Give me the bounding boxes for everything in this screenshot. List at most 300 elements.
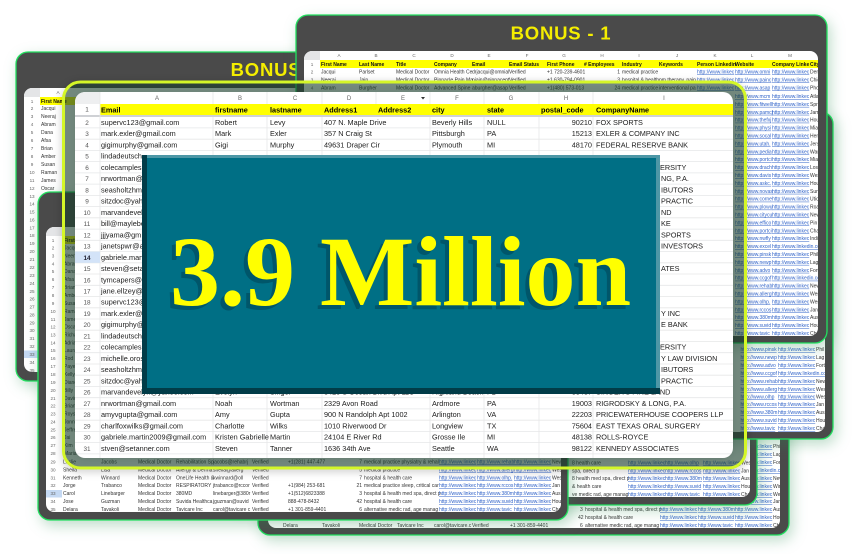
table: bonus 1: Advanced Spine: [434, 86, 471, 92]
table: bonus 1: http://www.davis: [735, 173, 772, 179]
table rows: upper right sheet: Fort: [816, 363, 826, 369]
table: bonus 1: Jers: [810, 141, 820, 147]
table: main spreadsheet: colecamples: [101, 343, 142, 352]
table: main spreadsheet: A: [155, 96, 159, 102]
table: main spreadsheet: 24104 E River Rd: [324, 433, 382, 442]
table: lower left sheet: Tavicare Inc: [176, 507, 203, 513]
table: bonus 1: Hen: [810, 134, 819, 140]
table: lower left sheet: Aus: [552, 491, 561, 497]
table rows: upper right sheet: http://www.linkec: [778, 426, 816, 432]
table rows: back sheet: http://www.tavic: [698, 523, 733, 529]
table: lower left sheet: 7: [52, 285, 55, 290]
table rows: back sheet: http://www.linkec: [735, 515, 773, 521]
table: main spreadsheet: michelle.oros: [101, 354, 144, 363]
table: lower left sheet: Medical Doctor: [138, 507, 172, 513]
table: lower left sheet: http://www.linkec: [439, 507, 477, 513]
table: lower left sheet: hospital & health med spa, direct p: [364, 491, 441, 497]
table: lower left sheet: http://www.linkec: [514, 507, 552, 513]
table: bonus 1: http://www.newp: [735, 260, 772, 266]
table: main spreadsheet: Levy: [270, 118, 286, 127]
table: bonus 1: http://www.linkec: [772, 102, 810, 108]
table: main spreadsheet: Amy: [215, 410, 230, 419]
table: main spreadsheet: janetspwr@a: [100, 242, 145, 250]
table: lower left sheet: http://www.linkec: [439, 499, 477, 505]
table: lower left sheet: 15: [50, 348, 56, 353]
table: lower left sheet: RESPIRATORY: [176, 483, 212, 489]
table: lower left sheet: 20: [50, 388, 56, 393]
table rows: upper right sheet: http://www.linkec: [778, 410, 816, 416]
table: main spreadsheet: 8: [85, 187, 89, 194]
table: main spreadsheet: MI: [487, 433, 495, 442]
table: lower left sheet: 6: [359, 507, 362, 513]
table: bonus 1: Person Linkedin: [697, 62, 736, 68]
table: bonus 1: http://www.linkec: [772, 94, 810, 100]
table: bonus 1: http://www.mcm: [735, 94, 770, 100]
table: main spreadsheet: 1636 34th Ave: [324, 444, 371, 453]
table: lower left sheet: Winnard: [101, 476, 120, 482]
table rows: back sheet: hospital & health med spa, direct p: [585, 507, 662, 513]
table: main spreadsheet: 3: [85, 131, 89, 138]
table: bonus 1: Lag: [810, 260, 819, 266]
table: main spreadsheet: EAST TEXAS ORAL SURGERY: [596, 421, 700, 430]
table rows: middle sheet: Wes: [741, 460, 751, 466]
table: lower left sheet: 17: [50, 364, 56, 369]
table: main spreadsheet: 33487: [572, 388, 592, 397]
table: main spreadsheet: postal_code: [541, 106, 584, 114]
table: bonus 1: Parlset: [359, 70, 375, 76]
table: lower left sheet: Kim: [64, 443, 73, 449]
table: bonus 1: Wan: [810, 149, 820, 155]
table: main spreadsheet: IBUTORS: [661, 185, 693, 194]
table: bonus 1: http://www.fitwell: [735, 102, 772, 108]
table rows: back sheet: +1 301-859-4401: [510, 523, 548, 529]
table rows: back sheet: Fort: [773, 460, 782, 466]
table: main spreadsheet: colecamples: [101, 163, 142, 172]
table: bonus 1: Hou: [810, 181, 819, 187]
table: main spreadsheet: Singer: [270, 388, 292, 397]
table rows: back sheet: Phil: [773, 444, 781, 450]
table: lower left sheet: Jan: [552, 483, 560, 489]
table: bonus 1: Pho: [810, 86, 819, 92]
table rows: upper right sheet: http://www.olhp: [740, 394, 775, 400]
table: main spreadsheet: lindadeutsch: [101, 152, 142, 161]
table: lower left sheet: Jacobs: [101, 460, 117, 466]
table rows: back sheet: Delara: [283, 523, 298, 529]
table rows: upper right sheet: http://www.linkec: [778, 418, 816, 424]
table: bonus 1: Pinnacle Pain Ma: [434, 78, 473, 84]
table: lower left sheet: Kenneth: [63, 476, 82, 482]
table: main spreadsheet: 19: [83, 311, 91, 318]
table: main spreadsheet: 90210: [572, 118, 592, 127]
table: lower left sheet: Brian: [64, 285, 76, 291]
table rows: middle sheet: http://www.linkec: [703, 476, 741, 482]
table: lower left sheet: 12: [50, 324, 56, 330]
table: bonus 1: Company Linke: [772, 62, 809, 68]
table: lower left sheet: sheila@allerg: [213, 468, 244, 474]
table: main spreadsheet: SPORTS: [661, 230, 691, 239]
table: bonus 1: Jacqui: [321, 70, 335, 76]
table rows: middle sheet: http://www.380m: [665, 476, 702, 482]
table: lower left sheet: Billy: [64, 388, 74, 394]
table: lower left sheet: http://www.linkec: [514, 476, 552, 482]
table: bonus 1: http://www.linkec: [772, 212, 810, 218]
table: lower left sheet: Linebarger: [101, 491, 125, 497]
table rows: upper right sheet: http://www.linkec: [778, 363, 816, 369]
table rows: middle sheet: http://www.linkec: [703, 492, 741, 498]
table: lower left sheet: carol@tavicare c: [213, 507, 251, 513]
table rows: middle sheet: Jan: [741, 468, 749, 474]
table: bonus left: 35: [29, 368, 35, 373]
table: lower left sheet: http://www.linkec: [439, 483, 477, 489]
table rows: back sheet: Verified: [472, 523, 489, 529]
table: lower left sheet: Diane: [64, 380, 77, 386]
table: main spreadsheet: ND: [661, 208, 672, 217]
table: bonus left: 14: [29, 202, 35, 206]
table: bonus 1: +1(480) 573-013: [547, 86, 584, 92]
table: lower left sheet: 3: [52, 254, 55, 258]
table: bonus left: 28: [29, 312, 35, 318]
table: main spreadsheet: 29: [83, 423, 91, 430]
table: main spreadsheet: Charlotte: [215, 421, 245, 430]
table: main spreadsheet: PRACTIC: [661, 197, 693, 206]
table: lower left sheet: Rod: [64, 356, 73, 362]
table rows: upper right sheet: http://www.linkec: [778, 387, 816, 393]
table rows: back sheet: http://www.380m: [698, 507, 735, 513]
table: main spreadsheet: PA: [487, 399, 496, 408]
table: bonus 1: Verified: [509, 86, 526, 92]
table: lower left sheet: +1(281) 447-477: [288, 460, 325, 466]
table: main spreadsheet: Exler: [270, 129, 287, 138]
table: lower left sheet: Cha: [552, 507, 561, 513]
table: bonus 1: 1: [311, 62, 314, 67]
table: lower left sheet: 8: [52, 293, 55, 298]
table: lower left sheet: hospital & health care: [364, 499, 412, 505]
panel: back sheet, bottom right: [253, 440, 800, 548]
table: bonus 1: http://www.linkec: [772, 315, 810, 321]
table rows: middle sheet: 8 health care: [572, 460, 601, 466]
table rows: back sheet: http://www.linkec: [735, 476, 773, 482]
table: bonus 1: G: [562, 53, 566, 58]
table: bonus 1: http://www.linkec: [697, 86, 735, 92]
table: main spreadsheet: CompanyName: [596, 106, 649, 114]
table rows: upper right sheet: Cha: [816, 426, 825, 432]
table: lower left sheet: alternative medic rad, age manag: [364, 507, 438, 513]
table: lower left sheet: http://www.linkec: [439, 468, 477, 474]
table rows: middle sheet: ve medic rad, age manag: [572, 492, 629, 498]
table: bonus 1: Cha: [810, 228, 819, 234]
table: bonus 1: http://www.askc.: [735, 181, 771, 187]
table: lower left sheet: Carol: [63, 491, 75, 497]
table: lower left sheet: Allergy & Derma: [176, 468, 213, 474]
table: bonus 1: hospital & health: [622, 78, 659, 84]
table: main spreadsheet: Address2: [378, 106, 411, 114]
table rows: back sheet: Tavakoli: [322, 523, 340, 529]
table: main spreadsheet: marvandevel: [101, 208, 143, 217]
table: main spreadsheet: 17: [83, 288, 91, 296]
table: main spreadsheet: 12: [83, 232, 91, 239]
table rows: middle sheet: & health care: [572, 484, 602, 490]
panel: bonus 1 sheet: [296, 15, 827, 343]
table: main spreadsheet: 28: [83, 412, 91, 419]
table rows: middle sheet: http://www.olhp: [665, 460, 699, 466]
table rows: back sheet: hospital & health care: [585, 515, 633, 521]
table: main spreadsheet: mark.exler@: [101, 309, 142, 318]
table: bonus 1: C: [412, 53, 416, 58]
table: main spreadsheet: Y INC: [661, 309, 680, 318]
table: main spreadsheet: ERSITY: [660, 343, 686, 352]
table: bonus 1: http://www.linkec: [772, 173, 810, 179]
table: main spreadsheet: ATES: [661, 264, 680, 273]
table rows: upper right sheet: http://www.advo: [740, 363, 776, 369]
table: lower left sheet: Neeraj: [64, 254, 79, 260]
table: lower left sheet: Verified: [252, 507, 269, 513]
table: lower left sheet: 888-478-8432: [288, 499, 319, 505]
table rows: back sheet: 3: [580, 507, 583, 513]
table: lower left sheet: medical practice sleep, critical car: [364, 483, 439, 489]
table: main spreadsheet: PRACTIC: [661, 376, 693, 385]
callout: 3.9 Million banner: [142, 155, 660, 394]
table: main spreadsheet: Highland Beach: [432, 388, 484, 397]
table: bonus 1: medical practice: [622, 86, 658, 92]
table rows: back sheet: Tavicare Inc: [397, 523, 424, 529]
table: bonus 1: Keywords: [659, 62, 683, 68]
table rows: back sheet: Win: [773, 484, 782, 490]
table: bonus 1: Hou: [810, 118, 819, 124]
table: bonus 1: http://www.linkec: [772, 331, 810, 337]
table rows: upper right sheet: New: [816, 379, 826, 385]
table: bonus 1: Company: [434, 62, 457, 68]
table: bonus 1: Los: [810, 165, 819, 171]
table: main spreadsheet: FEDERAL RESERVE BANK: [596, 140, 688, 149]
table: bonus 1: http://www.linkec: [772, 86, 810, 92]
table: bonus 1: +1 630-794-0901: [547, 78, 585, 84]
table: main spreadsheet: Robert: [215, 118, 237, 127]
table: lower left sheet: Raman: [64, 309, 80, 315]
table: main spreadsheet: Gupta: [270, 410, 291, 419]
table: bonus 1: http://www.linkec: [772, 307, 810, 313]
table: bonus left: 24: [29, 281, 35, 286]
table rows: upper right sheet: http://www.rccos: [740, 402, 777, 408]
table: bonus 1: http://www.linkec: [772, 284, 810, 290]
table: lower left sheet: Leslie: [63, 460, 76, 466]
table: main spreadsheet: mark.exler@gmail.com: [101, 129, 176, 138]
table: lower left sheet: jtrabanco@rccor: [212, 483, 250, 489]
table: main spreadsheet: 30: [83, 435, 91, 442]
table: lower left sheet: Amber: [64, 293, 79, 299]
table rows: upper right sheet: http://www.380m: [740, 410, 777, 416]
table rows: back sheet: Cha: [773, 523, 782, 529]
table: main spreadsheet: I: [663, 96, 665, 102]
table rows: back sheet: http://www.linkec: [660, 507, 698, 513]
table rows: back sheet: 6: [580, 523, 583, 529]
table: main spreadsheet: state: [487, 106, 504, 114]
table rows: back sheet: Hou: [773, 515, 782, 521]
table: bonus 1: http://www.linkedin.co: [772, 244, 820, 250]
table rows: back sheet: http://www.linkec: [735, 507, 773, 513]
table rows: back sheet: carol@tavicare.c: [434, 523, 472, 529]
table: bonus 1: Atla: [810, 94, 819, 100]
table: lower left sheet: 34: [50, 499, 56, 504]
table: bonus 1: K: [713, 53, 717, 58]
table rows: upper right sheet: http://www.tavic: [740, 426, 776, 432]
table: main spreadsheet: SINGER'S FINE LAND: [596, 388, 670, 397]
table: lower left sheet: 7: [359, 460, 362, 466]
table: bonus 1: L: [751, 53, 754, 58]
table: bonus left: 7: [31, 146, 34, 151]
table: main spreadsheet: amyvgupta@gmail.com: [101, 410, 177, 419]
table: main spreadsheet: RIGRODSKY & LONG, P.A.: [596, 399, 686, 408]
table rows: middle sheet: http://www.linkec: [703, 484, 741, 490]
headline number: 3.9 Million: [166, 220, 627, 331]
table rows: middle sheet: http://www.linkec: [703, 460, 741, 466]
table: bonus 1: http://www.linkec: [772, 323, 810, 329]
table: lower left sheet: http://www.tavic: [477, 507, 512, 513]
table: bonus 1: http://www.novas: [735, 189, 773, 195]
table: lower left sheet: 14: [50, 340, 56, 346]
table: lower left sheet: Verified: [252, 468, 269, 474]
table rows: middle sheet: http://www.linkec: [628, 476, 666, 482]
table: bonus 1: http://www.portci: [735, 157, 772, 163]
table: main spreadsheet: Plymouth: [432, 140, 462, 149]
table rows: back sheet: alternative medic rad, age manag: [585, 523, 659, 529]
table: lower left sheet: medical practice: [364, 468, 400, 474]
table: lower left sheet: http://www.linkec: [439, 491, 477, 497]
table: lower left sheet: Medical Doctor: [138, 491, 172, 497]
table: main spreadsheet: Murphy: [270, 140, 295, 149]
table rows: upper right sheet: http://www.linkec: [778, 347, 816, 353]
table: main spreadsheet: Pittsburgh: [432, 129, 465, 138]
table: bonus 1: Mia: [810, 126, 818, 132]
table rows: upper right sheet: http://www.linkedin.co: [778, 371, 826, 377]
table: bonus 1: http://www.linkec: [772, 70, 810, 76]
table: main spreadsheet: charlfoxwilks@gmail.com: [101, 421, 183, 430]
table: lower left sheet: 18: [50, 372, 56, 377]
table: lower left sheet: 21: [50, 396, 56, 401]
table: bonus 1: Jame: [810, 110, 822, 116]
table: bonus left: 13: [29, 194, 35, 199]
table rows: back sheet: [283, 444, 783, 529]
table: main spreadsheet: lastname: [270, 106, 302, 114]
table: main spreadsheet: FL: [487, 388, 496, 397]
table: main spreadsheet: 2: [85, 120, 89, 127]
table: bonus left: Jacqui: [41, 106, 55, 112]
table: main spreadsheet: IBUTORS: [661, 365, 693, 374]
table: main spreadsheet: Address1: [324, 106, 357, 114]
table: bonus 1: First Name: [321, 62, 347, 68]
table: bonus 1: http://www.linkec: [772, 228, 810, 234]
table: bonus 1: njain@pinnacept: [472, 78, 510, 84]
table: bonus 1: http://www.linkec: [772, 149, 810, 155]
table rows: back sheet: Medical Doctor: [359, 523, 393, 529]
table: bonus 1: http://www.utah.: [735, 141, 771, 147]
table: lower left sheet: Jai: [64, 435, 70, 441]
table rows: upper right sheet: Hou: [816, 418, 825, 424]
table: bonus left: 3: [31, 114, 34, 119]
table: bonus left: 16: [29, 218, 35, 222]
table: lower left sheet: http://www.rccos: [477, 483, 514, 489]
table: bonus left: 10: [29, 170, 35, 175]
table: bonus left: 11: [30, 178, 35, 183]
table: lower left sheet: OneLife Health &: [176, 476, 215, 482]
table: lower left sheet: Payel: [64, 364, 77, 370]
table: lower left sheet: 5: [359, 468, 362, 474]
table: bonus 1: medical practice: [622, 70, 658, 76]
table: bonus 1: New: [810, 284, 820, 290]
table rows: back sheet: http://www.linkec: [735, 499, 773, 505]
table rows: middle sheet: spa, direct p: [572, 468, 599, 474]
table: bonus 1: Verified: [509, 78, 526, 84]
table rows: middle sheet: Cha: [741, 492, 750, 498]
table: lower left sheet: Maria: [64, 451, 77, 457]
table: main spreadsheet: Steven: [215, 444, 238, 453]
table: main spreadsheet: 407 N. Maple Drive: [324, 118, 386, 127]
table: bonus 1: http://www.pinsk: [735, 252, 772, 258]
table: main spreadsheet: 31: [83, 446, 91, 453]
table: main spreadsheet: Wortman: [270, 399, 299, 408]
table: main spreadsheet: 21: [83, 334, 91, 340]
table: lower left sheet: http://www.linkec: [514, 460, 552, 466]
table rows: upper right sheet: http://www.linkec: [778, 402, 816, 408]
table: lower left sheet: linebarger@380r: [213, 491, 251, 497]
table rows: upper right sheet: http://www.linkec: [778, 394, 816, 400]
table: lower left sheet: Suvida Healthca: [176, 499, 213, 505]
table rows: back sheet: http://www.suvid: [698, 515, 734, 521]
table rows: middle sheet: 8 health med spa, direct p: [572, 476, 630, 482]
table: lower left sheet: Verified: [252, 476, 269, 482]
table: lower left sheet: http://www.linkec: [514, 483, 552, 489]
table: bonus 1: Mia: [810, 157, 818, 163]
table: bonus 1: H: [600, 53, 604, 58]
table: main spreadsheet: 900 N Randolph Apt 1002: [324, 410, 408, 419]
table rows: back sheet: http://www.linkec: [735, 492, 773, 498]
table: bonus 1: Phil: [810, 252, 818, 258]
table: lower left sheet: Medical Doctor: [138, 483, 172, 489]
table: lower left sheet: 21: [356, 483, 362, 489]
table: bonus left: 19: [29, 241, 35, 246]
table: main spreadsheet: Arlington: [432, 410, 461, 419]
table: lower left sheet: 30: [50, 468, 56, 472]
table: lower left sheet: 10: [50, 309, 56, 314]
table: bonus 1: +1 720-239-4601: [547, 70, 585, 76]
table: main spreadsheet: steven@seta: [101, 264, 145, 273]
table: lower left sheet: 32: [50, 483, 56, 488]
table: bonus left: 6: [31, 138, 34, 143]
table: bonus 1: http://www.omni: [735, 70, 770, 76]
table: bonus left: 29: [29, 320, 35, 326]
table: bonus left: [24, 88, 76, 372]
table: main spreadsheet: 15: [83, 266, 91, 273]
table: main spreadsheet: 1010 Riverwood Dr: [324, 421, 387, 430]
table: lower left sheet: Lisa: [101, 468, 110, 474]
table: bonus left: 22: [29, 265, 35, 270]
table: lower left sheet: http://www.linkec: [514, 499, 552, 505]
table: main spreadsheet: lindadeutsch: [101, 332, 142, 340]
table: main spreadsheet: ROLLS-ROYCE: [596, 433, 648, 442]
table: lower left sheet: 2: [52, 246, 55, 250]
table: bonus 1: Den: [810, 70, 819, 76]
table: main spreadsheet: nrwortman@gmail.com: [101, 399, 176, 408]
table rows: middle sheet: http://www.tavic: [665, 492, 700, 498]
table: main spreadsheet: Evelyn: [215, 388, 237, 397]
table: lower left sheet: http://www.allerg: [477, 468, 514, 474]
table: main spreadsheet: 4: [85, 142, 89, 149]
table: bonus 1: http://www.portci: [735, 228, 772, 234]
table rows: back sheet: Jan: [773, 499, 781, 505]
table: lower left sheet: 23: [50, 412, 56, 416]
table: bonus left: 23: [29, 273, 35, 278]
table: bonus 1: Verified: [509, 70, 526, 76]
table: bonus 1: http://www.380m: [735, 315, 772, 321]
